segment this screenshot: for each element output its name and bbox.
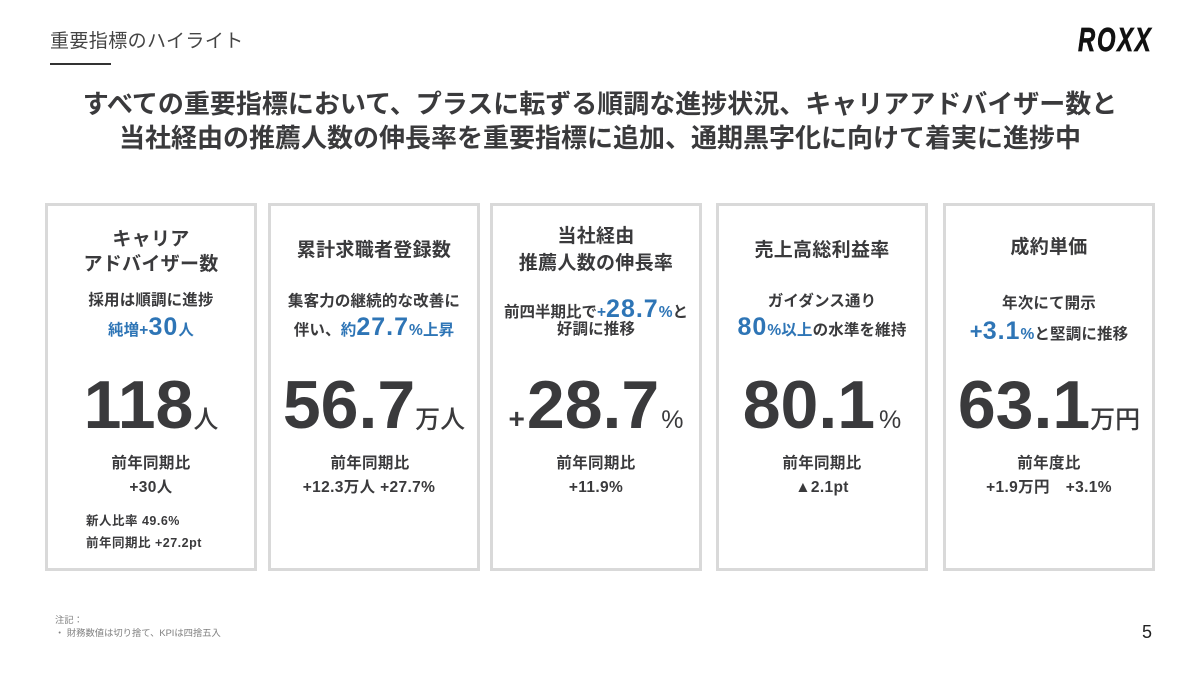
panel title: 当社経由 xyxy=(557,226,635,247)
main value: 118人 xyxy=(84,367,218,443)
main value: 63.1万円 xyxy=(958,367,1140,443)
panel title: 推薦人数の伸長率 xyxy=(519,253,673,274)
main value: +28.7 % xyxy=(509,367,683,443)
footnote: ・ 財務数値は切り捨て、KPIは四捨五入 xyxy=(55,628,221,638)
year-over-year: 前年同期比 xyxy=(782,455,862,472)
description: 年次にて開示 xyxy=(1002,295,1096,312)
panel: career advisors xyxy=(45,203,257,571)
year-over-year value: +12.3万人 +27.7% xyxy=(303,479,435,496)
year-over-year: 前年同期比 xyxy=(111,455,191,472)
main message line 2: 当社経由の推薦人数の伸長率を重要指標に追加、通期黒字化に向けて着実に進捗中 xyxy=(119,123,1081,153)
panel title: アドバイザー数 xyxy=(83,254,219,275)
year-over-year value: ▲2.1pt xyxy=(795,479,849,496)
year-over-year: 前年同期比 xyxy=(556,455,636,472)
description: 採用は順調に進捗 xyxy=(88,292,214,309)
panel: referral growth xyxy=(490,203,702,571)
panel title: 売上高総利益率 xyxy=(754,240,890,261)
highlight: +3.1%と堅調に推移 xyxy=(970,317,1128,345)
year-over-year value: +1.9万円 +3.1% xyxy=(986,479,1112,496)
year-over-year: 前年同期比 xyxy=(330,455,410,472)
year-over-year: 前年度比 xyxy=(1017,455,1081,472)
panel: gross margin xyxy=(716,203,928,571)
description line 2: 好調に推移 xyxy=(557,321,635,338)
new graduate ratio: 新人比率 49.6% xyxy=(86,514,180,528)
slide heading: 重要指標のハイライト xyxy=(50,31,244,52)
highlight: 伴い、約27.7%上昇 xyxy=(294,313,454,341)
description: 前四半期比で+28.7%と xyxy=(504,295,688,323)
main value: 56.7万人 xyxy=(283,367,465,443)
year-over-year value: +30人 xyxy=(129,479,173,496)
panel title: 成約単価 xyxy=(1010,237,1088,258)
panel title: 累計求職者登録数 xyxy=(297,240,451,261)
ratio comparison: 前年同期比 +27.2pt xyxy=(86,536,202,550)
description: ガイダンス通り xyxy=(768,293,876,310)
footnote xyxy=(55,615,221,638)
heading underline xyxy=(50,63,111,65)
panel: registered job seekers xyxy=(268,203,480,571)
highlight: 純増+30人 xyxy=(108,313,194,341)
highlight: 80%以上の水準を維持 xyxy=(738,313,906,341)
main value: 80.1 % xyxy=(743,367,901,443)
main message line 1: すべての重要指標において、プラスに転ずる順調な進捗状況、キャリアアドバイザー数と xyxy=(83,89,1117,119)
year-over-year value: +11.9% xyxy=(569,479,623,496)
description: 集客力の継続的な改善に xyxy=(288,293,460,310)
footnote: 注記： xyxy=(55,615,83,625)
page number: 5 xyxy=(1142,622,1152,642)
panel title: キャリア xyxy=(112,229,190,250)
panel title xyxy=(83,229,219,275)
panel title xyxy=(519,226,673,274)
panel: average contract price xyxy=(943,203,1155,571)
logo: ROXX: ROXX xyxy=(1078,21,1153,58)
